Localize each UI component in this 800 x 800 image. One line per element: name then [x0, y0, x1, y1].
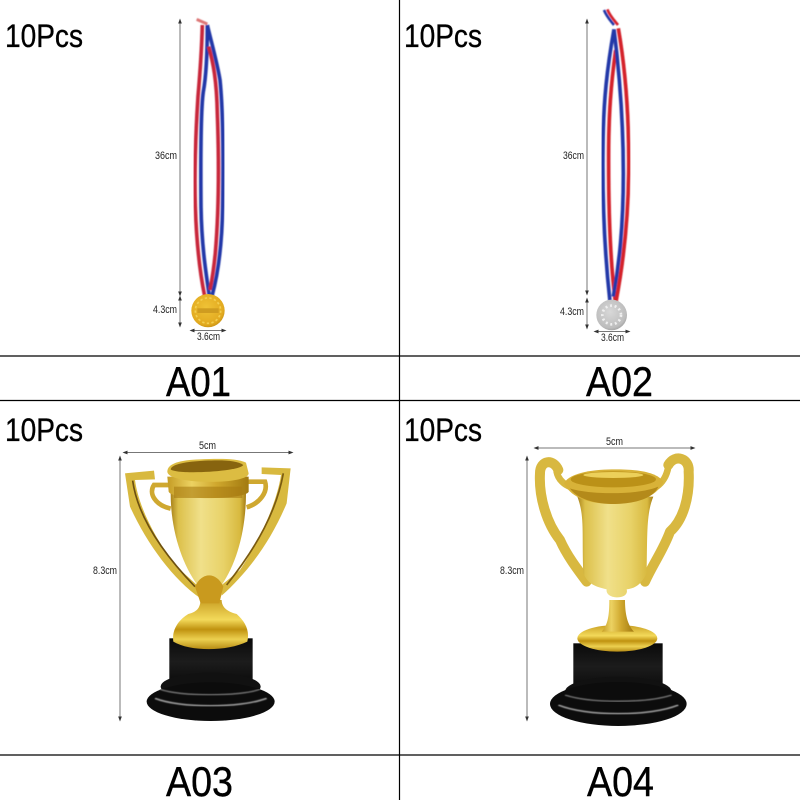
foot	[577, 625, 657, 652]
handles	[540, 458, 689, 582]
quantity label A02: 10Pcs	[404, 18, 482, 54]
base	[147, 638, 275, 721]
dimension: trophy height 8.3cm: 8.3cm	[93, 565, 117, 577]
trophy A03	[125, 459, 291, 721]
label: A02: A02	[586, 358, 653, 405]
dimension: medal height 4.3cm: 4.3cm	[560, 306, 584, 318]
quantity label A03: 10Pcs	[5, 412, 83, 448]
dimension: ribbon length 36cm: 36cm	[563, 150, 584, 162]
medal disc	[191, 294, 225, 327]
rim band	[167, 477, 249, 498]
label: A01: A01	[166, 358, 231, 405]
panel: A04 trophy	[404, 412, 693, 726]
panel: A03 trophy	[5, 412, 291, 721]
medal with ribbon A02	[596, 9, 629, 330]
medal disc	[596, 300, 627, 330]
medal with ribbon A01	[191, 19, 225, 327]
dimension: medal width 3.6cm: 3.6cm	[197, 331, 220, 343]
base	[550, 643, 687, 726]
stem	[602, 600, 634, 632]
dimension: medal width 3.6cm: 3.6cm	[601, 332, 624, 344]
dimension: trophy height 8.3cm: 8.3cm	[500, 565, 524, 577]
rim	[564, 469, 663, 504]
cup mouth	[571, 471, 656, 487]
panel: A02 silver medal	[404, 9, 629, 344]
quantity label A04: 10Pcs	[404, 412, 482, 448]
foot	[173, 600, 248, 649]
handles	[125, 467, 291, 598]
dimension: ribbon length 36cm: 36cm	[155, 150, 177, 162]
dimension: medal height 4.3cm	[560, 300, 587, 327]
quantity label A01: 10Pcs	[5, 18, 83, 54]
cup	[577, 497, 653, 597]
dimension: trophy width 5cm: 5cm	[606, 436, 623, 448]
trophy A04	[540, 458, 689, 726]
panel: A01 gold medal	[5, 18, 225, 343]
cup mouth	[167, 459, 249, 482]
dimension: trophy width 5cm: 5cm	[199, 440, 216, 452]
ribbon	[603, 9, 629, 302]
cup	[171, 493, 246, 589]
dimension: medal height 4.3cm	[153, 298, 180, 325]
dimension: medal height 4.3cm: 4.3cm	[153, 304, 177, 316]
ribbon	[195, 19, 223, 296]
knop	[195, 575, 223, 603]
